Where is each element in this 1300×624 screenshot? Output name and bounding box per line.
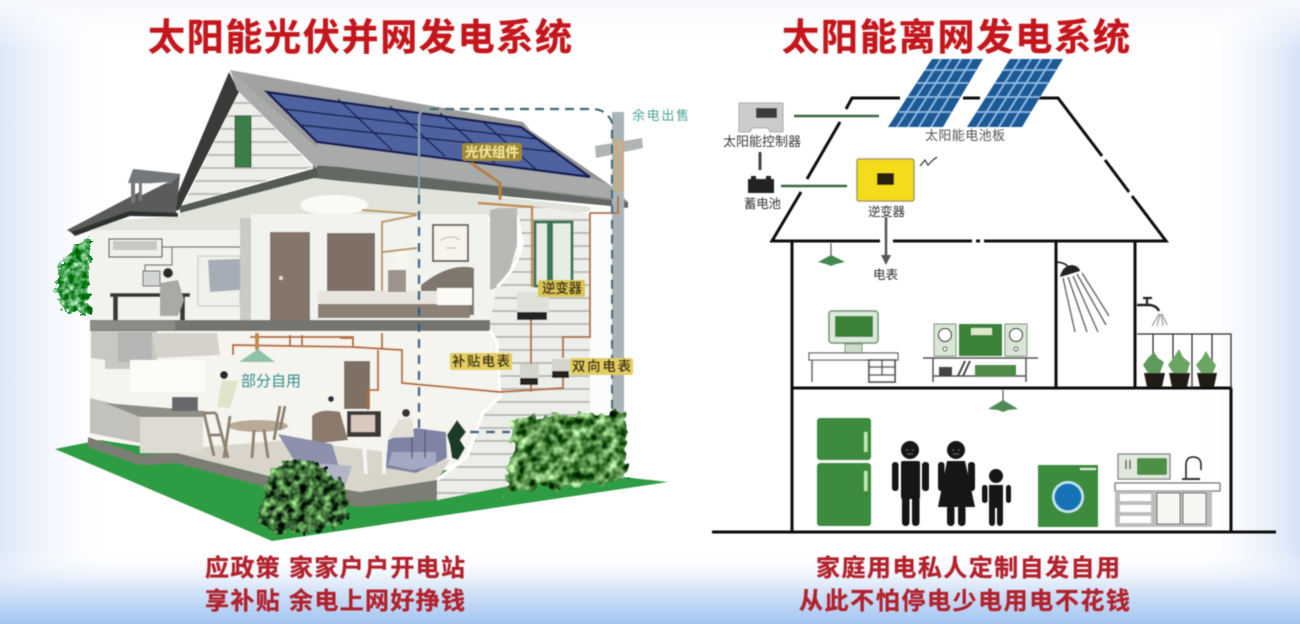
- battery: [748, 176, 774, 193]
- bedside lamp: [393, 250, 412, 268]
- potted plants: [1143, 349, 1217, 387]
- kitchen unit: [1115, 454, 1220, 527]
- wardrobe panel: [327, 233, 375, 291]
- label: solar controller: 太阳能控制器: [723, 134, 801, 149]
- gable barge board: [170, 72, 239, 212]
- kitchen counter: [90, 398, 140, 443]
- column: [240, 218, 251, 322]
- siding wall: [437, 204, 590, 500]
- label: solar panel: 太阳能电池板: [925, 128, 1005, 143]
- air conditioner: [109, 239, 162, 257]
- slogan: right: 家庭用电私人定制自发自用: [816, 554, 1120, 582]
- grey interior column: [490, 208, 517, 290]
- ground floor slab: [177, 440, 450, 492]
- feed-in meter: [520, 364, 539, 385]
- bed: [318, 293, 470, 318]
- slogan: left: [205, 555, 465, 615]
- foundation: [88, 437, 437, 507]
- utility pole: [595, 112, 643, 478]
- green window: [535, 222, 572, 286]
- computer desk: [809, 311, 898, 382]
- gable lower fascia: [180, 168, 318, 213]
- gable window: [235, 116, 251, 167]
- left sofa: [278, 434, 352, 484]
- picture frame: [433, 225, 468, 261]
- interior room wall: [250, 214, 488, 320]
- microwave: [172, 397, 198, 411]
- ground floor lamp: [239, 349, 275, 362]
- front shrub: [257, 460, 350, 533]
- upper floor wall: [90, 222, 500, 322]
- lawn: [55, 440, 668, 541]
- kitchen hood: [91, 331, 157, 369]
- kitchen window: [130, 360, 205, 392]
- balcony railing: [1137, 334, 1231, 388]
- label: electric meter: 电表: [873, 268, 898, 282]
- woman: [217, 371, 238, 408]
- ground floor wall: [90, 331, 500, 470]
- floor slab: [90, 320, 490, 331]
- coffee table: [352, 440, 388, 474]
- dormer: [128, 169, 181, 203]
- house outline: [712, 98, 1276, 532]
- shower: [1057, 262, 1109, 332]
- ceiling lamp upper: [818, 243, 845, 266]
- tv: [347, 411, 381, 437]
- faucet: [1137, 298, 1167, 326]
- illustration: off-grid house: [712, 59, 1276, 532]
- label: pv modules: 光伏组件: [465, 144, 520, 160]
- inverter unit: [517, 292, 549, 320]
- wiring upper left: [145, 247, 240, 271]
- title: off-grid system: 太阳能离网发电系统: [782, 17, 1130, 58]
- slogan: left: 享补贴 余电上网好挣钱: [205, 588, 465, 615]
- door upstairs: [270, 232, 310, 322]
- wall climber plant: [56, 238, 90, 314]
- roof gable edge: [230, 70, 325, 168]
- grid feed dashed line: [430, 109, 612, 470]
- label: inverter: 逆变器: [542, 280, 582, 296]
- dining table: [228, 420, 288, 458]
- illustration: grid-tied house cutaway: [55, 70, 668, 541]
- stereo: [923, 324, 1038, 382]
- slogan: right: 从此不怕停电少电用电不花钱: [799, 588, 1130, 615]
- child: [982, 469, 1011, 526]
- desk and person: [110, 293, 190, 297]
- connection lines: [781, 116, 879, 186]
- eave light band: [313, 142, 626, 200]
- indoor plant: [447, 420, 466, 460]
- bed headboard: [421, 267, 474, 315]
- gable: [183, 92, 313, 205]
- mother: [938, 441, 975, 526]
- right hedge: [505, 412, 626, 492]
- stairs person: [312, 396, 348, 444]
- label: partly self-use: 部分自用: [241, 373, 301, 390]
- label: battery: 蓄电池: [744, 197, 781, 211]
- ceiling lamp lower: [988, 390, 1018, 412]
- solar controller: [739, 103, 783, 132]
- solar panels: [888, 59, 1063, 127]
- main ceiling: [90, 176, 620, 230]
- ac wave: [920, 157, 937, 166]
- label: bidirectional meter: 双向电表: [572, 358, 632, 374]
- interior door downstairs: [344, 361, 370, 409]
- label: surplus sold: 余电出售: [632, 108, 689, 123]
- family figures: [892, 441, 1011, 526]
- white strip beside pole: [590, 206, 613, 476]
- inverter: [857, 159, 914, 201]
- label: inverter: 逆变器: [868, 204, 905, 219]
- slogan: right: [799, 554, 1130, 615]
- eave dark band: [313, 165, 628, 208]
- solar array: [267, 92, 590, 177]
- orange cables: [616, 138, 622, 192]
- left wing roof: [67, 175, 180, 235]
- right sofa: [386, 428, 447, 473]
- arrow to meter: [881, 217, 891, 265]
- label: subsidy meter: 补贴电表: [452, 353, 510, 369]
- slogan: left: 应政策 家家户户开电站: [205, 555, 465, 582]
- dining chairs: [204, 406, 285, 458]
- washing machine: [1038, 465, 1098, 527]
- refrigerator: [817, 418, 871, 526]
- ceiling lamp: [300, 195, 368, 215]
- bidirectional meter: [552, 359, 570, 378]
- seated person: [388, 409, 414, 438]
- main roof: [230, 70, 628, 202]
- father: [892, 441, 929, 526]
- title: grid-tied system: 太阳能光伏并网发电系统: [148, 17, 572, 58]
- siding cutaway edge: [437, 240, 523, 480]
- window upstairs: [198, 256, 240, 306]
